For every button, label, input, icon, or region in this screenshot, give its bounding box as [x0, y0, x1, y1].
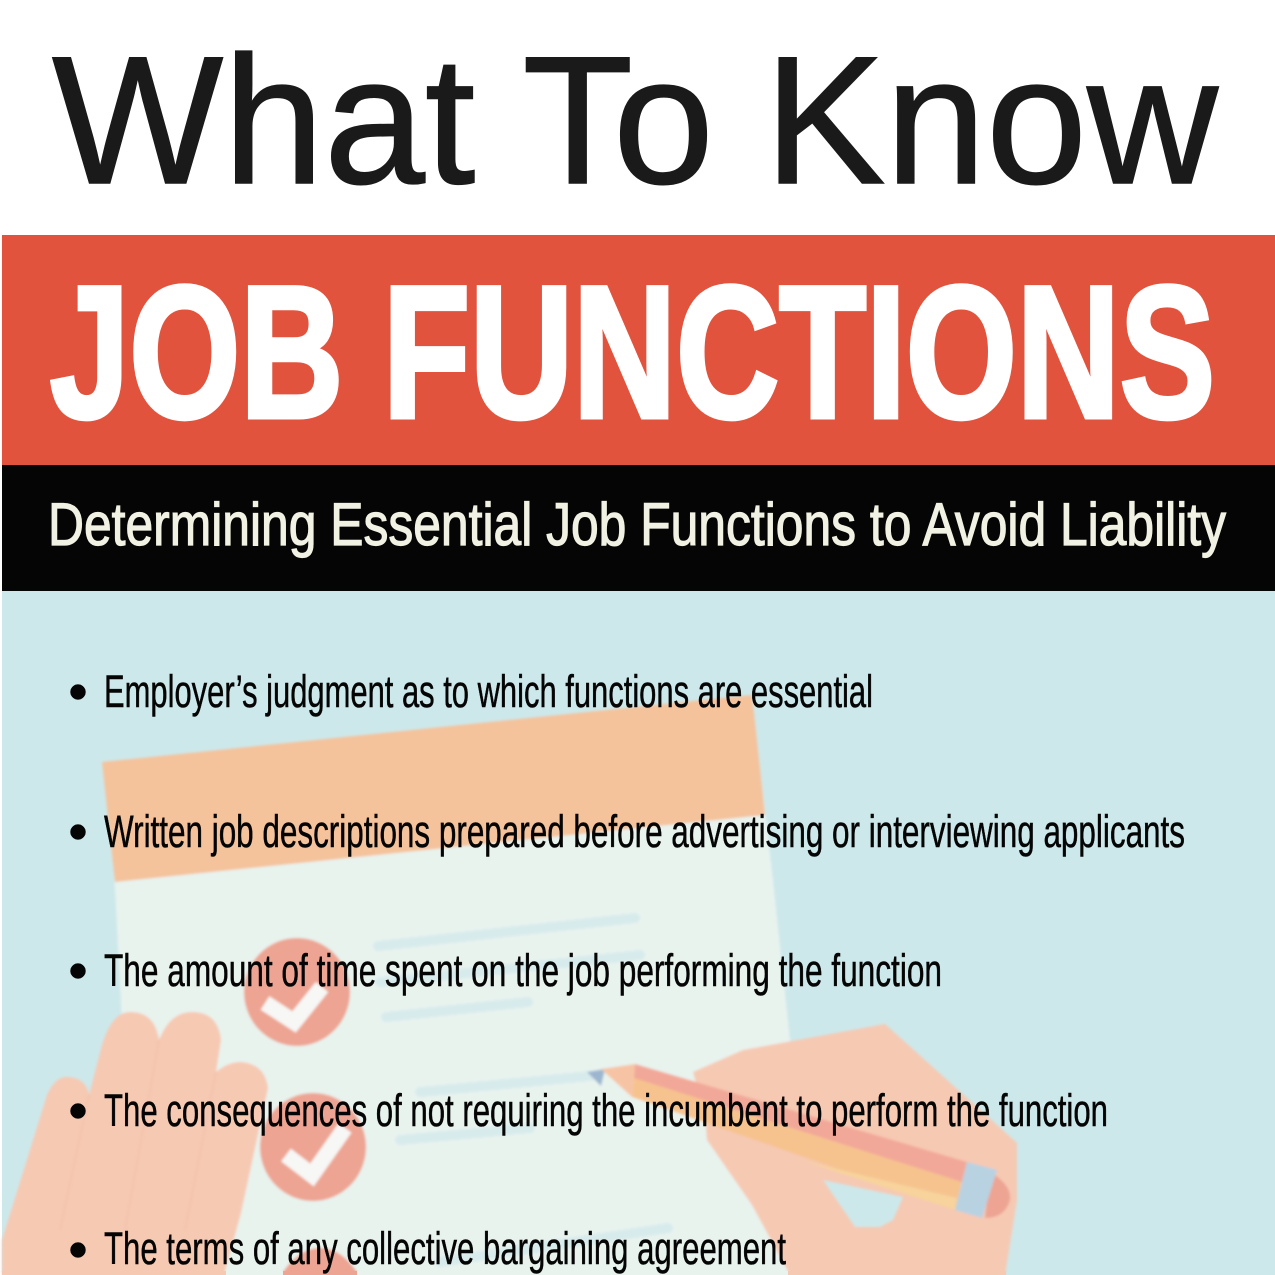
subtitle bar — [2, 465, 1275, 591]
bullet 1: Employer’s judgment as to which functions are essential — [104, 666, 873, 717]
bullet list — [70, 666, 1185, 1274]
bullet 5 — [70, 1223, 786, 1274]
check circle 2 — [260, 1093, 366, 1201]
check circle 3 — [281, 1248, 359, 1275]
finger creases — [60, 1040, 216, 1230]
right hand — [693, 1024, 1017, 1275]
text lines on paper — [378, 918, 668, 1262]
bullet 3: The amount of time spent on the job performing the function — [104, 945, 942, 996]
illustration: bottom edge fill — [2, 1271, 1006, 1275]
panel: list background — [2, 591, 1275, 1275]
paper — [114, 700, 830, 1275]
title: What To Know — [52, 18, 1219, 222]
pencil — [587, 1064, 1010, 1218]
check circle 1 — [244, 938, 350, 1046]
bullet 1 — [70, 666, 873, 717]
tape — [102, 695, 765, 882]
bullet 3 — [70, 945, 942, 996]
bullet 5: The terms of any collective bargaining agreement — [104, 1223, 786, 1274]
illustration: hands on checklist — [2, 695, 1017, 1275]
left hand — [2, 1012, 268, 1275]
